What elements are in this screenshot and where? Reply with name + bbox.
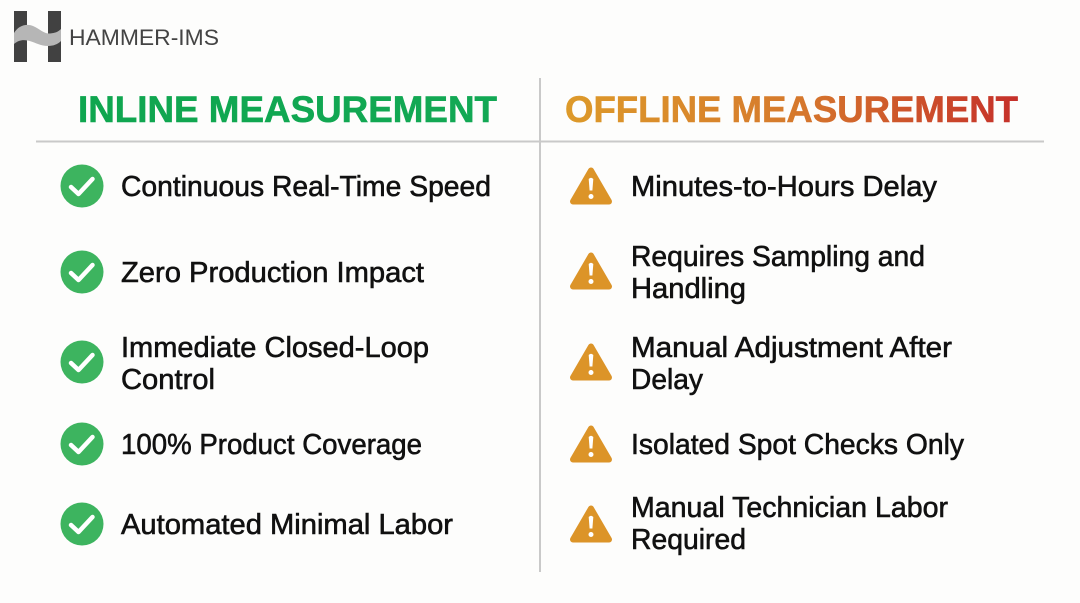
item: minutes-to-hours delay: Minutes-to-Hours Delay (631, 171, 937, 203)
horizontal divider (36, 140, 1044, 142)
item: continuous real-time speed: Continuous Real-Time Speed (121, 171, 491, 203)
item: manual adjustment after delay: Delay (631, 364, 703, 396)
item: manual adjustment after delay (573, 332, 952, 396)
item: immediate closed-loop control: Immediate Closed-Loop (121, 332, 429, 364)
item: continuous real-time speed (60, 164, 491, 208)
heading: offline measurement: OFFLINE MEASUREMENT (565, 88, 1018, 130)
item: requires sampling and handling (573, 241, 925, 305)
item: isolated spot checks only: Isolated Spot Checks Only (631, 429, 964, 461)
logo mark (14, 11, 61, 62)
item: 100% product coverage (60, 422, 422, 466)
logo wordmark: HAMMER-IMS (69, 25, 219, 50)
logo: Hammer-IMS (14, 11, 219, 62)
item: requires sampling and handling: Requires Sampling and (631, 241, 925, 273)
vertical divider (539, 78, 541, 572)
item: manual adjustment after delay: Manual Adjustment After (631, 332, 952, 364)
panel: offline measurement (565, 88, 1018, 556)
item: immediate closed-loop control (60, 332, 429, 396)
item: zero production impact (60, 250, 424, 294)
item: manual technician labor required: Manual Technician Labor (631, 492, 948, 524)
heading: inline measurement: INLINE MEASUREMENT (78, 88, 497, 130)
item: immediate closed-loop control: Control (121, 364, 215, 396)
item: zero production impact: Zero Production Impact (121, 257, 424, 289)
panel: inline measurement (60, 88, 497, 546)
item: requires sampling and handling: Handling (631, 273, 746, 305)
item: manual technician labor required: Required (631, 524, 746, 556)
item: automated minimal labor (60, 502, 453, 546)
item: 100% product coverage: 100% Product Coverage (121, 429, 422, 461)
item: manual technician labor required (573, 492, 948, 556)
item: automated minimal labor: Automated Minimal Labor (121, 509, 453, 541)
